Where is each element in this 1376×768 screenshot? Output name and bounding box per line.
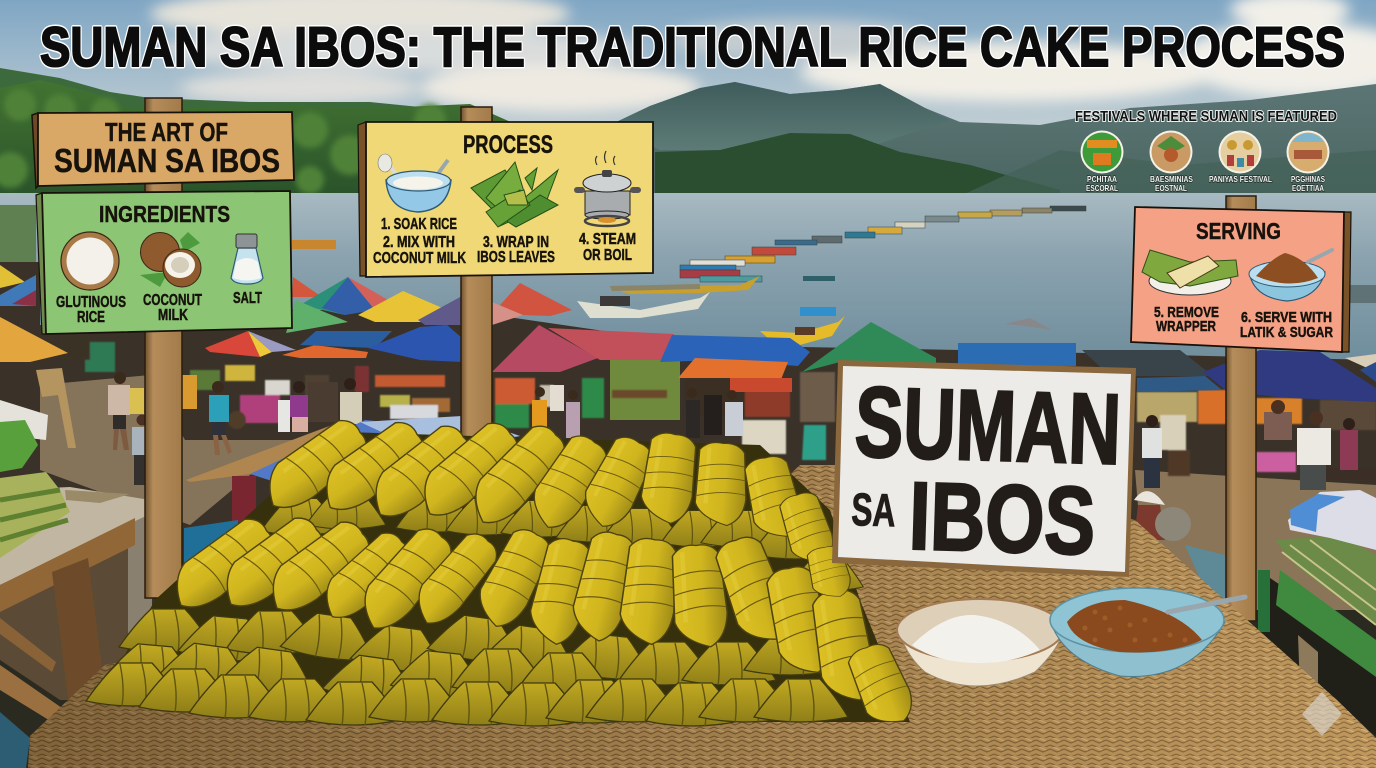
festival badge 1 (1080, 130, 1124, 174)
icon: bowl of soaking rice (378, 154, 451, 212)
label: glutinous rice: GLUTINOUS (56, 294, 126, 311)
background: ground base (0, 190, 1376, 768)
label: step 4: OR BOIL (583, 247, 632, 264)
woven mat table (28, 465, 1376, 768)
white sign: Suman sa Ibos: SUMAN (853, 366, 1123, 486)
background: distant mountains (0, 68, 1376, 225)
panel: process (358, 122, 653, 277)
label: step 6: 6. SERVE WITH (1241, 309, 1332, 326)
icon: bowl of latik (1249, 250, 1332, 301)
sign: the art of suman sa ibos: THE ART OF (105, 117, 228, 147)
label: step 5: 5. REMOVE (1154, 304, 1219, 321)
sparkle mark (1302, 692, 1342, 736)
label: coconut milk (143, 292, 202, 324)
bowl of latik (1050, 588, 1245, 677)
back row of suman (261, 492, 863, 591)
third row of suman (86, 609, 848, 726)
festival badge 2 (1150, 130, 1192, 174)
left wooden table with leaves (0, 368, 152, 768)
front row of suman (162, 512, 919, 732)
right table with green leaves (1258, 490, 1376, 735)
white sign: Suman sa Ibos: SA (851, 483, 896, 536)
label: step 1 and 2: COCONUT MILK (373, 250, 467, 267)
background: market ground (0, 262, 1376, 610)
festival labels: EOSTNAL (1155, 183, 1187, 193)
label: glutinous rice (56, 294, 126, 326)
icon: steaming pot (574, 151, 641, 226)
label: step 1 and 2: 2. MIX WITH (383, 234, 455, 251)
festivals section (1075, 108, 1337, 193)
label: step 1 and 2 (373, 216, 467, 267)
label: step 4: 4. STEAM (579, 231, 636, 248)
label: step 3: 3. WRAP IN (483, 234, 549, 251)
festival labels: PCHITAA (1087, 174, 1117, 184)
sign: the art of suman sa ibos (32, 112, 294, 188)
white sign: Suman sa Ibos (832, 360, 1136, 577)
heading: process: PROCESS (463, 131, 553, 159)
background: row of boats (292, 206, 1376, 345)
label: coconut milk: COCONUT (143, 292, 202, 309)
label: step 4 (579, 231, 636, 264)
icon: wrapped leaves (471, 162, 558, 227)
panel: serving (1131, 207, 1351, 352)
label: step 5: WRAPPER (1156, 318, 1216, 335)
festival badge 3 (1218, 130, 1262, 174)
top row of suman (255, 414, 838, 568)
market crowd (108, 372, 1358, 605)
label: step 3: IBOS LEAVES (477, 249, 555, 266)
bowl of white sugar (897, 599, 1063, 686)
background: lake (0, 193, 1376, 383)
festival labels (1086, 174, 1325, 193)
sign: the art of suman sa ibos: SUMAN SA IBOS (54, 142, 280, 179)
background: left shore (0, 205, 36, 265)
festival labels: PGGHINAS (1291, 174, 1325, 184)
label: salt: SALT (233, 290, 262, 307)
festival labels: EOETTIAA (1292, 183, 1324, 193)
label: step 6 (1240, 309, 1333, 341)
label: step 6: LATIK & SUGAR (1240, 324, 1333, 341)
icon: glutinous rice (61, 232, 119, 290)
festival labels: BAESMINIAS (1150, 174, 1193, 184)
label: step 5 (1154, 304, 1219, 335)
stall with blue tarp (184, 416, 520, 578)
market stalls and goods (60, 335, 1376, 480)
panel: ingredients (36, 191, 292, 334)
festival labels: PANIYAS FESTIVAL (1209, 174, 1272, 184)
suman pile (86, 414, 919, 732)
icon: salt shaker (231, 234, 263, 284)
festival labels: ESCORAL (1086, 183, 1118, 193)
background: sky (0, 0, 1376, 215)
label: glutinous rice: RICE (77, 309, 105, 326)
label: step 3 (477, 234, 555, 266)
heading: festivals: FESTIVALS WHERE SUMAN IS FEATURED (1075, 108, 1337, 125)
icon: coconut (140, 232, 201, 287)
label: step 1 and 2: 1. SOAK RICE (381, 216, 457, 233)
heading: serving: SERVING (1196, 218, 1281, 244)
heading: ingredients: INGREDIENTS (99, 201, 230, 227)
sign posts (145, 98, 1256, 621)
label: coconut milk: MILK (158, 307, 189, 324)
festival badge 4 (1286, 130, 1330, 174)
market tents (0, 265, 1376, 440)
icon: unwrapped suman on plate (1142, 250, 1238, 295)
white sign: Suman sa Ibos: IBOS (908, 463, 1097, 575)
